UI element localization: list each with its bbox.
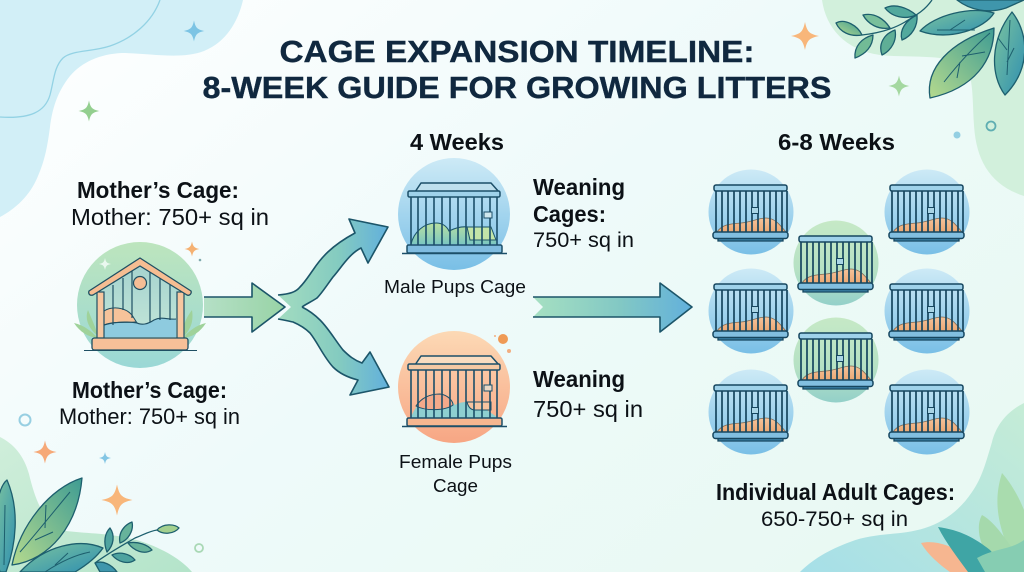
decoration: top-right blob (822, 0, 1024, 196)
label: weaning cages top: Cages: (533, 201, 606, 227)
label: weaning bottom: 750+ sq in (533, 396, 643, 422)
icon: adult cage 1 (708, 170, 794, 254)
icon: male pups cage (398, 158, 510, 270)
arrow: weaning to adult cages (533, 283, 692, 332)
label: weaning cages top: Weaning (533, 174, 625, 200)
label: individual adult cages (716, 479, 955, 531)
label: female pups cage: Female Pups (399, 451, 512, 472)
icon: adult cage 2 (884, 170, 970, 254)
title: 8-WEEK GUIDE FOR GROWING LITTERS (202, 70, 832, 105)
label: mother's cage top: Mother’s Cage: (77, 177, 239, 203)
label: weaning cages top: 750+ sq in (533, 229, 634, 252)
icon: adult cage 7 (708, 370, 794, 454)
icon: adult cage 4 (708, 268, 794, 354)
title: CAGE EXPANSION TIMELINE: (280, 34, 754, 69)
label: mother's cage top (71, 177, 269, 230)
icon: adult cage 6 (794, 318, 878, 402)
label: individual adult cages: 650-750+ sq in (761, 508, 908, 531)
decoration: bottom-right leaves (921, 473, 1024, 572)
label: mother's cage top: Mother: 750+ sq in (71, 204, 269, 230)
title (202, 34, 832, 105)
label: individual adult cages: Individual Adult Cages: (716, 479, 955, 505)
label: weaning bottom (533, 366, 643, 422)
icon: adult cage 5 (884, 268, 970, 354)
label: female pups cage: Cage (433, 475, 478, 496)
decoration: top-right leaves (836, 0, 1024, 98)
label: male pups cage: Male Pups Cage (384, 276, 526, 297)
label: weaning bottom: Weaning (533, 366, 625, 392)
decoration: bottom-right blob (800, 403, 1024, 572)
label: mother's cage bottom: Mother’s Cage: (72, 377, 227, 403)
arrow: mother to split (204, 283, 285, 332)
label: weaning cages top (533, 174, 634, 252)
icon group: adult cages (708, 170, 970, 454)
label: mother's cage bottom (59, 377, 240, 429)
decoration: bottom-left blob (0, 437, 192, 572)
icon: female pups cage (398, 331, 511, 443)
decoration: top-left blob (0, 0, 243, 217)
label: female pups cage (399, 451, 512, 496)
icon: adult cage 3 (794, 220, 878, 306)
arrow: upward branch to male cage (278, 219, 388, 307)
label: mother's cage bottom: Mother: 750+ sq in (59, 404, 240, 429)
decoration: bottom-left leaves (0, 478, 179, 572)
heading: 6-8 weeks: 6-8 Weeks (778, 129, 895, 155)
arrow: downward branch to female cage (278, 307, 389, 395)
heading: 4 weeks: 4 Weeks (410, 129, 504, 155)
icon: mother's cage (74, 242, 206, 368)
icon: adult cage 8 (884, 370, 970, 454)
